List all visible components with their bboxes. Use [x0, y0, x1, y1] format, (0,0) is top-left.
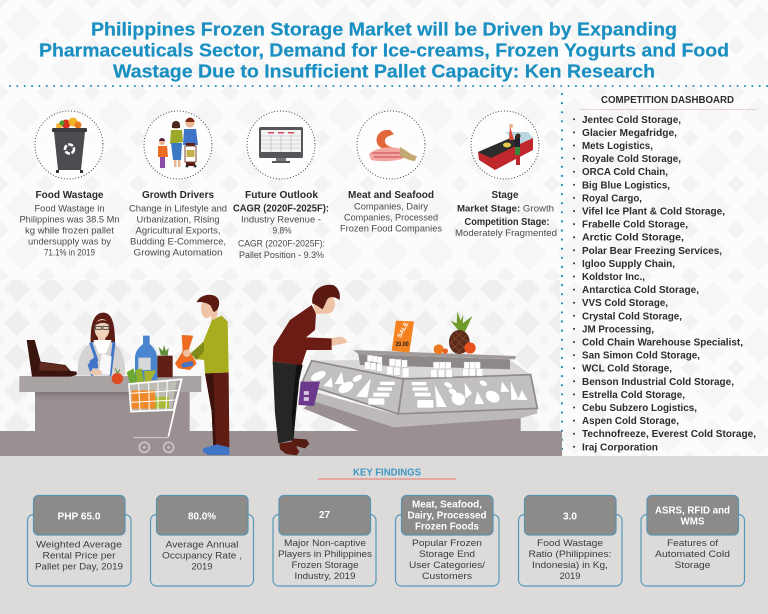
competitor list: Antarctica Cold Storage,: [582, 285, 699, 296]
panel: meat and seafood: Meat and Seafood: [348, 190, 434, 201]
cash register: [27, 340, 77, 377]
icon: shrimp and meat: [369, 130, 417, 161]
card: rental price: [28, 496, 131, 586]
panel: stage: Stage: [492, 190, 519, 201]
panel: growth drivers: Growth Drivers: [142, 190, 214, 201]
pineapple and oranges: [434, 312, 476, 354]
illustration: floor: [0, 431, 562, 456]
panel: growth drivers: Change in Lifestyle and: [129, 204, 227, 214]
card: end user categories: Meat, Seafood,: [412, 500, 482, 510]
freezer cabinet: [302, 350, 537, 432]
card: food wastage ratio: 3.0: [563, 512, 577, 522]
panel: food wastage: kg while frozen pallet: [25, 226, 114, 236]
icon: family with cart: [158, 118, 198, 168]
illustration: checkout scene: [19, 295, 229, 455]
card: automated cold storage: [641, 496, 744, 586]
panel: competition dashboard: [574, 95, 757, 453]
competitor list: Big Blue Logistics,: [582, 180, 670, 191]
competitor list: Technofreeze, Everest Cold Storage,: [582, 429, 756, 440]
man in green shirt: [175, 295, 229, 455]
competitor list: Iraj Corporation: [582, 442, 658, 453]
panel: stage: Moderately Fragmented: [455, 228, 557, 239]
man with basket: [273, 285, 347, 455]
competitor list: [582, 115, 756, 453]
card: non-captive players: [273, 496, 376, 586]
card: food wastage ratio: [518, 496, 622, 586]
panel: food wastage: Philippines was 38.5 Mn: [20, 214, 120, 226]
competitor list: ORCA Cold Chain,: [582, 167, 668, 178]
card: end user categories: Frozen Foods: [415, 522, 479, 532]
icon: monitor with table: [259, 127, 303, 163]
card: occupancy rate: 2019: [192, 562, 212, 572]
competitor list: Glacier Megafridge,: [582, 128, 677, 139]
display shelf: [353, 350, 516, 377]
card: automated cold storage: ASRS, RFID and: [655, 506, 730, 516]
panel: growth drivers: Agricultural Exports,: [136, 226, 220, 236]
competitor list: Frabelle Cold Storage,: [582, 220, 688, 231]
panel: food wastage: 71.1% in 2019: [44, 248, 95, 258]
card: automated cold storage: WMS: [680, 516, 705, 528]
competitor list: Royale Cold Storage,: [582, 154, 681, 165]
card: non-captive players: Major Non-captive: [284, 538, 366, 549]
freezer items: [309, 369, 528, 408]
panel: food wastage: Food Wastage in: [34, 204, 104, 214]
competitor list: Cebu Subzero Logistics,: [582, 403, 697, 414]
competitor list: Jentec Cold Storage,: [582, 115, 681, 126]
panel: growth drivers: Urbanization, Rising: [136, 214, 220, 226]
card: rental price: Weighted Average: [36, 540, 122, 550]
panel: future outlook: Pallet Position - 9.3%: [239, 250, 325, 261]
panel: meat and seafood: Companies, Dairy: [354, 202, 428, 212]
card: non-captive players: 27: [319, 510, 330, 521]
competitor list: Vifel Ice Plant & Cold Storage,: [582, 206, 725, 218]
panel: stage: Market Stage: Growth: [457, 204, 554, 214]
card: non-captive players: Players in Philippines: [278, 549, 372, 560]
competitor list: Aspen Cold Storage,: [582, 416, 679, 427]
cashier: [77, 313, 125, 376]
panel: food wastage: Food Wastage: [36, 190, 104, 201]
panel: meat and seafood: [340, 111, 442, 234]
competitor list: Polar Bear Freezing Services,: [582, 246, 722, 257]
panel: food wastage: [20, 111, 120, 258]
panel: food wastage: undersupply was by: [28, 236, 111, 248]
competitor list: Cold Chain Warehouse Specialist,: [582, 338, 743, 348]
panel: key findings: [0, 456, 768, 614]
panel: stage: Competition Stage:: [464, 217, 550, 228]
sale sign: SALE: [396, 321, 410, 339]
card: rental price: Rental Price per: [42, 550, 116, 562]
sale sign: [392, 321, 414, 353]
card: non-captive players: Industry, 2019: [294, 571, 356, 582]
icon: checkout counter: [478, 124, 533, 170]
apple: [112, 368, 123, 384]
panel: future outlook: Industry Revenue -: [241, 214, 321, 226]
shopping cart: [127, 368, 182, 452]
card: end user categories: Storage End: [419, 549, 475, 560]
card: food wastage ratio: 2019: [560, 571, 580, 582]
card: occupancy rate: Average Annual: [166, 540, 238, 550]
panel: stage: [455, 111, 557, 239]
card: end user categories: User Categories/: [409, 560, 485, 571]
card: end user categories: Popular Frozen: [412, 538, 482, 549]
card: rental price: Pallet per Day, 2019: [35, 562, 123, 572]
illustration: freezer scene: [273, 285, 537, 455]
title: Pharmaceuticals Sector, Demand for Ice-creams, Frozen Yogurts and Food: [39, 40, 729, 60]
card: end user categories: [396, 496, 499, 586]
panel: growth drivers: Growing Automation: [134, 248, 222, 258]
card: occupancy rate: 80.0%: [188, 512, 216, 522]
title: [39, 20, 729, 82]
title: Philippines Frozen Storage Market will be Driven by Expanding: [91, 20, 677, 40]
title: Wastage Due to Insufficient Pallet Capacity: Ken Research: [113, 62, 655, 82]
competitor list: Benson Industrial Cold Storage,: [582, 377, 734, 388]
card: automated cold storage: Automated Cold: [655, 549, 730, 560]
panel: future outlook: [233, 111, 329, 261]
competitor list: San Simon Cold Storage,: [582, 351, 700, 362]
competitor list: Koldstor Inc.,: [582, 272, 645, 283]
panel: meat and seafood: Frozen Food Companies: [340, 224, 442, 234]
card: occupancy rate: Occupancy Rate ,: [162, 550, 242, 562]
card: non-captive players: Frozen Storage: [292, 560, 358, 571]
icon: waste bin: [52, 118, 87, 173]
card: occupancy rate: [150, 496, 254, 586]
potted plant: [157, 345, 173, 377]
panel: future outlook: CAGR (2020F-2025F):: [233, 204, 329, 214]
panel: future outlook: CAGR (2020F-2025F):: [238, 238, 325, 250]
card: automated cold storage: Storage: [674, 560, 710, 571]
competitor list: VVS Cold Storage,: [582, 298, 668, 309]
competitor list: Royal Cargo,: [582, 193, 642, 204]
card: food wastage ratio: Food Wastage: [537, 538, 603, 549]
heading: key findings: KEY FINDINGS: [353, 468, 421, 478]
panel: growth drivers: [129, 111, 227, 258]
card: food wastage ratio: Indonesia) in Kg,: [532, 560, 608, 571]
competitor list: Estrella Cold Storage,: [582, 390, 685, 401]
competitor list: JM Processing,: [582, 324, 654, 335]
competitor list: Igloo Supply Chain,: [582, 259, 675, 270]
panel: future outlook: 9.8%: [272, 226, 292, 236]
counter: [19, 376, 201, 432]
water bottle: [135, 336, 157, 380]
panel: meat and seafood: Companies, Processed: [344, 212, 438, 224]
card: end user categories: Dairy, Processed: [408, 510, 486, 522]
panel: competition dashboard: COMPETITION DASHBOARD: [601, 95, 734, 106]
card: rental price: PHP 65.0: [58, 512, 101, 522]
competitor list: Crystal Cold Storage,: [582, 311, 682, 322]
card: food wastage ratio: Ratio (Philippines:: [528, 549, 612, 560]
sale sign: 20.00: [395, 342, 409, 348]
card: end user categories: Customers: [422, 571, 472, 582]
competitor list: WCL Cold Storage,: [582, 364, 672, 375]
competitor list: Arctic Cold Storage,: [582, 233, 684, 244]
card: automated cold storage: Features of: [667, 538, 718, 549]
competitor list: Mets Logistics,: [582, 141, 653, 152]
panel: future outlook: Future Outlook: [245, 190, 318, 201]
heading: key findings: [318, 468, 456, 479]
panel: growth drivers: Budding E-Commerce,: [130, 236, 226, 248]
